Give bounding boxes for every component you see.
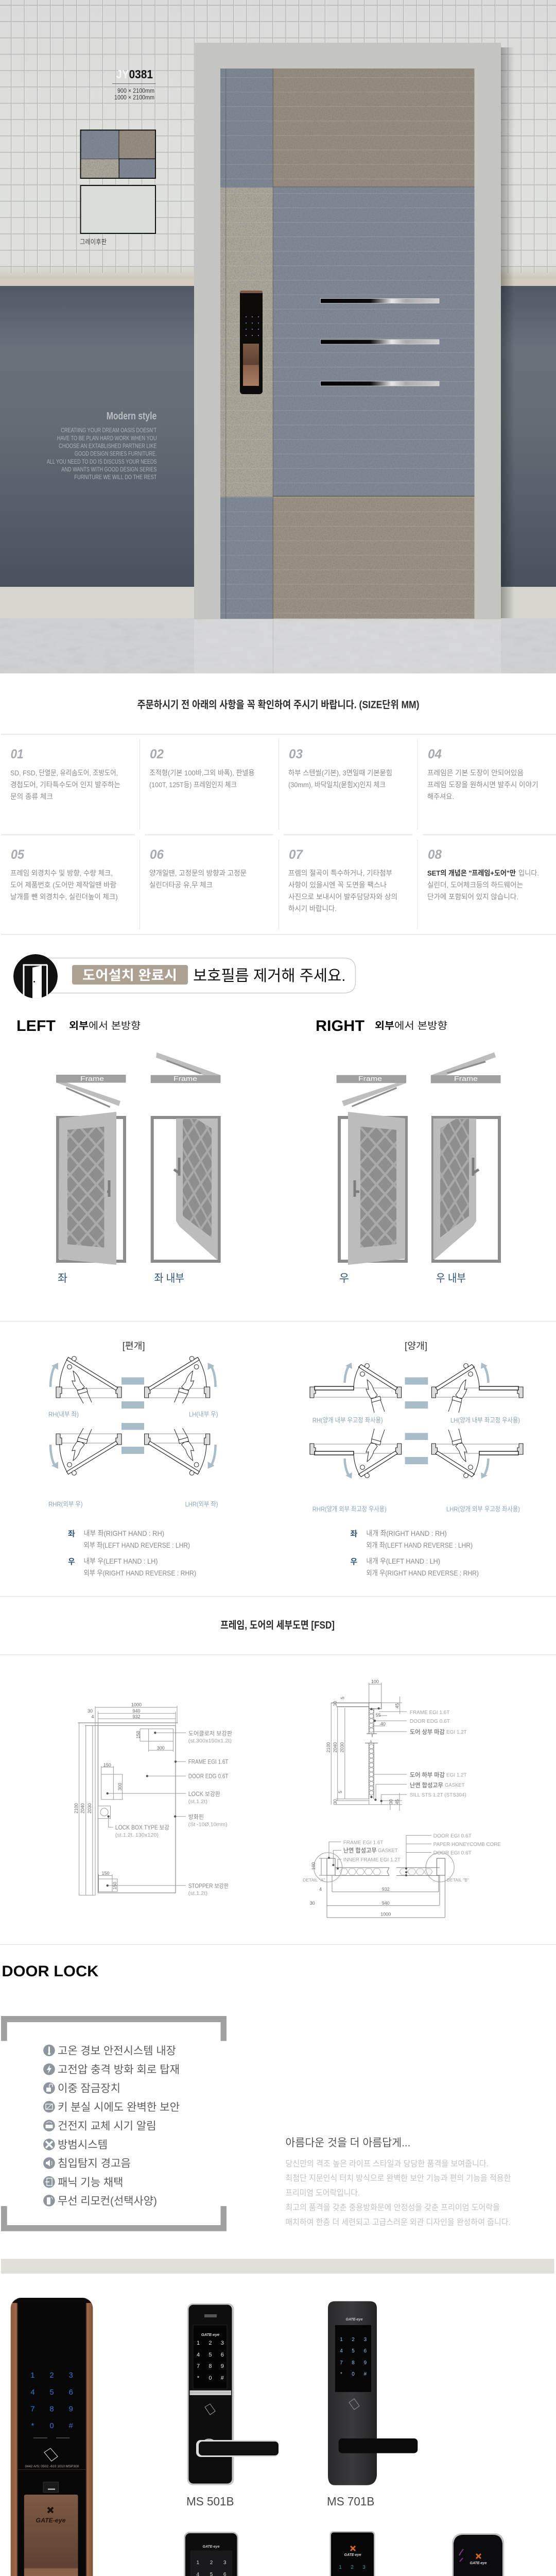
protective film banner xyxy=(13,954,355,999)
drawing callouts: door: (st.300x150x1.2t) xyxy=(188,1738,232,1744)
drawing callouts: door: LOCK BOX TYPE 보강 xyxy=(115,1824,169,1831)
legend: single door: 외부 좌(LEFT HAND REVERSE : LHR) xyxy=(83,1541,190,1549)
product: MS 701B: 5 xyxy=(352,2348,355,2354)
product: MSP 300: 2 xyxy=(49,2371,54,2380)
model number: JY xyxy=(116,67,129,81)
section callouts: DOOR EDG 0.6T xyxy=(410,1718,450,1724)
product: MS 701B: 6 xyxy=(364,2348,367,2354)
legend: single door: 우 xyxy=(68,1557,75,1566)
note 05: 도어 제품번호 (도어만 제작일땐 바람 xyxy=(10,881,116,889)
product: MS 701B: * xyxy=(340,2371,342,2377)
drawing dimensions: 2030 xyxy=(87,1803,92,1814)
swing diagram: double door RH: RH(양개 내부 우고정 좌사용) xyxy=(312,1416,383,1424)
RIGHT heading: 외부 xyxy=(375,1020,394,1031)
model number: 0381 xyxy=(129,67,153,81)
note 01 xyxy=(10,747,120,801)
product: MSP 300: 8 xyxy=(49,2405,54,2413)
product: MS 830B: 2 xyxy=(210,2560,213,2566)
horizontal section labels: DOOR EGI 0.6T xyxy=(433,1833,472,1839)
drawing dimensions: 4 xyxy=(91,1714,94,1719)
swing diagram: single door LHR xyxy=(145,1428,218,1508)
drawing callouts: door: STOPPER 보강판 xyxy=(188,1883,229,1890)
section dimensions: 5 xyxy=(340,1697,345,1699)
section dimensions: 2040 xyxy=(333,1742,338,1753)
hero scene: door against tiled wall xyxy=(0,0,556,673)
product: MSP 300: 1 xyxy=(30,2371,35,2380)
door front: right interior xyxy=(433,1117,499,1261)
model number xyxy=(116,67,153,81)
drawing callouts: door: FRAME EGI 1.6T xyxy=(188,1759,229,1765)
product: MS 701B: 1 xyxy=(340,2337,343,2343)
technical drawing: vertical section xyxy=(331,1683,407,1811)
horizontal section labels: PAPER HONEYCOMB CORE xyxy=(433,1841,501,1848)
note 07: 사항이 있을시엔 꼭 도면을 팩스나 xyxy=(288,881,387,889)
drawing dimensions: 150 xyxy=(101,1871,110,1876)
single door heading: [편개] xyxy=(123,1341,145,1351)
section callouts: FRAME EGI 1.6T xyxy=(410,1709,450,1716)
note 03 xyxy=(288,747,392,789)
drawing callouts: door: DOOR EDG 0.6T xyxy=(188,1773,229,1780)
feature: panic function: 패닉 기능 채택 xyxy=(58,2177,123,2189)
modern style copy: AND WANTS WITH GOOD DESIGN SERIES xyxy=(61,467,157,473)
legend: double door: 좌 xyxy=(350,1530,357,1538)
product: MS 501B: 2 xyxy=(208,2340,212,2346)
feature: security system: 방범시스템 xyxy=(58,2139,108,2151)
feature: battery alert: 건전지 교체 시기 알림 xyxy=(58,2120,157,2132)
product: MS 830B: 1 xyxy=(197,2560,200,2566)
feature list xyxy=(43,2044,180,2207)
modern style copy: GOOD DESIGN SERIES FURNITURE. xyxy=(75,451,157,457)
product: MS 501B: 4 xyxy=(197,2352,200,2358)
product: MS 701B: 2 xyxy=(352,2337,355,2343)
section callouts xyxy=(410,1709,467,1798)
note 08: 08 xyxy=(428,848,442,862)
section dimensions: 30 xyxy=(333,1701,338,1706)
drawing callouts: door: 도어클로저 보강판 xyxy=(188,1730,232,1737)
legend: double door xyxy=(350,1529,479,1577)
door front: right exterior xyxy=(339,1112,406,1265)
center markers: double door xyxy=(405,1377,428,1464)
product: MS 701B: 8 xyxy=(352,2360,355,2366)
model rule xyxy=(112,83,155,84)
door shadow xyxy=(501,47,514,618)
product label: MS 701B: MS 701B xyxy=(327,2495,374,2508)
note 04: 프레임은 기본 도장이 안되어있음 xyxy=(427,769,524,777)
swing diagram: double door RHR xyxy=(310,1429,402,1513)
product: MS 830B: GATE-eye xyxy=(203,2545,220,2549)
section dimensions xyxy=(326,1679,399,1804)
section dimensions: 2100 xyxy=(326,1742,331,1753)
section dimensions: 40 xyxy=(380,1721,386,1726)
note 08: 입니다. xyxy=(518,869,539,877)
note 03: (30mm), 바닥일치(묻힘X)인지 체크 xyxy=(288,781,386,789)
section dimensions: 5 xyxy=(338,1791,343,1793)
product: MSP 300: 4 xyxy=(30,2388,35,2397)
swing diagram: double door LHR xyxy=(431,1429,523,1513)
product: MS 701B: GATE-eye xyxy=(346,2318,363,2321)
swing diagram: single door RHR: RHR(외부 우) xyxy=(48,1500,82,1508)
note 06: 06 xyxy=(150,848,164,862)
note 05: 날개를 뺀 외경치수, 실린더높이 체크) xyxy=(10,893,118,901)
door front: left interior xyxy=(152,1117,219,1261)
product: MSP 300: GATE-eye xyxy=(36,2518,66,2524)
section dimensions: 2030 xyxy=(340,1742,345,1753)
section callouts: SILL STS 1.2T (STS304) xyxy=(410,1792,466,1798)
double door heading: [양개] xyxy=(405,1341,427,1351)
drawing dimensions: 2100 xyxy=(74,1803,79,1814)
product: MS 501B: # xyxy=(221,2375,224,2381)
product: MS 501B: * xyxy=(197,2375,200,2381)
swing diagram: single door RH xyxy=(48,1357,121,1418)
door labels: 좌 xyxy=(58,1273,67,1284)
RIGHT heading: RIGHT xyxy=(316,1018,364,1035)
swing diagram: single door RHR xyxy=(48,1428,121,1508)
product: MSP 300: 0442 A/S: 0502 -610 1010 MSP300 xyxy=(25,2465,79,2468)
horizontal section labels: 난연 합성고무 xyxy=(343,1846,377,1854)
product: MS 601B: GATE-eye xyxy=(470,2562,487,2565)
modern style copy: HAVE TO BE PLAN HARD WORK WHEN YOU xyxy=(57,435,157,442)
gray backing swatch xyxy=(80,185,155,233)
product: MS 501B: GATE-eye xyxy=(201,2332,219,2337)
note 02: (100T, 125T등) 프레임인지 체크 xyxy=(149,781,237,789)
door labels: 우 xyxy=(339,1273,349,1284)
plan view: right interior: Frame xyxy=(454,1075,478,1082)
icon: door in black circle xyxy=(13,954,58,999)
note 02: 조적형(기본 100바,그외 바폭), 판넬용 xyxy=(149,769,255,777)
plan view: right exterior: Frame xyxy=(358,1075,382,1082)
swing diagram: single door RH: RH(내부 좌) xyxy=(48,1411,79,1418)
order notice heading: 주문하시기 전 아래의 사항을 꼭 확인하여 주시기 바랍니다. (SIZE단위 MM) xyxy=(137,699,419,711)
product: MS 701B: 0 xyxy=(352,2371,355,2377)
door handle slots xyxy=(320,299,439,386)
chair rail xyxy=(0,279,556,286)
product: MS 501B: 8 xyxy=(208,2363,212,2369)
product: MS 902 xyxy=(329,2531,418,2576)
product: MS 701B: 3 xyxy=(364,2337,367,2343)
swing diagram: single door LHR: LHR(외부 좌) xyxy=(185,1500,218,1508)
baseboard xyxy=(0,587,556,618)
horizontal section labels: 940 xyxy=(382,1901,390,1906)
drawing dimensions: 300 xyxy=(157,1745,165,1751)
LEFT heading xyxy=(16,1018,141,1035)
section dimensions: 45 xyxy=(394,1799,399,1804)
legend: double door: 내개 좌(RIGHT HAND : RH) xyxy=(366,1529,447,1537)
RIGHT heading: 에서 본방향 xyxy=(394,1020,447,1031)
door lock copy heading: 아름다운 것을 더 아름답게... xyxy=(285,2137,410,2149)
RIGHT heading xyxy=(316,1018,447,1035)
feature: wireless remote: 무선 리모컨(선택사양) xyxy=(58,2195,157,2207)
door lock copy xyxy=(285,2159,511,2227)
legend: single door: 내부 우(LEFT HAND : LH) xyxy=(83,1557,158,1565)
drawing callouts: door xyxy=(115,1730,232,1896)
product: MS 902: 2 xyxy=(351,2565,354,2570)
drawing dimensions: 150 xyxy=(112,1882,117,1890)
center markers: single door xyxy=(121,1377,144,1454)
drawing dimensions: 940 xyxy=(132,1708,141,1714)
product: MSP 300: 7 xyxy=(30,2405,35,2413)
horizontal section labels: 932 xyxy=(382,1887,390,1892)
feature: lost key security: 키 분실 시에도 완벽한 보안 xyxy=(58,2102,180,2113)
door labels: 우 내부 xyxy=(436,1273,466,1284)
horizontal section labels: 30 xyxy=(310,1901,315,1906)
note 04 xyxy=(427,747,538,801)
plan view: left exterior xyxy=(56,1075,126,1108)
plan view: left interior xyxy=(151,1053,220,1083)
tag xyxy=(72,965,188,985)
note 02: 02 xyxy=(150,747,164,761)
product: MS 902: 1 xyxy=(339,2565,342,2570)
door lock copy: 프리미엄 도어락입니다. xyxy=(285,2189,360,2198)
product: MS 701B: 7 xyxy=(340,2360,343,2366)
note 07: 07 xyxy=(289,848,303,862)
section callouts: GASKET xyxy=(445,1782,465,1788)
drawing markers xyxy=(106,1732,177,1887)
drawing callouts: door: (st.1.2t) xyxy=(188,1799,207,1805)
note 07 xyxy=(288,848,397,913)
modern style copy: ALL YOU NEED TO DO IS DISCUSS YOUR NEEDS xyxy=(47,459,157,465)
product: MS 501B: 1 xyxy=(197,2340,200,2346)
section callouts: EGI 1.2T xyxy=(446,1772,467,1778)
drawing callouts: door: (st.1.2t) xyxy=(188,1890,207,1896)
size text: 1000 × 2100mm xyxy=(114,94,154,101)
note 01: SD, FSD, 단열문, 유리솜도어, 조방도어, xyxy=(10,769,118,777)
note 08 xyxy=(427,848,539,901)
product: MS 501B: 9 xyxy=(221,2363,224,2369)
product label: MS 501B: MS 501B xyxy=(186,2495,234,2508)
note 04: 해주셔요. xyxy=(427,792,454,801)
product: MS 501B: 3 xyxy=(221,2340,224,2346)
plan view: right exterior xyxy=(337,1075,406,1107)
notes grid xyxy=(10,747,539,913)
legend: single door: 좌 xyxy=(68,1530,75,1538)
floor xyxy=(0,618,556,673)
DOOR LOCK heading: DOOR LOCK xyxy=(2,1963,99,1980)
product: MS 701B: 4 xyxy=(340,2348,343,2354)
section callouts: 난연 합성고무 xyxy=(410,1782,443,1789)
product: MS 830B: 3 xyxy=(223,2560,227,2566)
swing diagram: double door LHR: LHR(양개 외부 우고정 좌사용) xyxy=(446,1505,520,1513)
feature: high temperature alarm: 고온 경보 안전시스템 내장 xyxy=(58,2045,176,2057)
product: MSP 300: 3 xyxy=(69,2371,73,2380)
note 04: 04 xyxy=(428,747,442,761)
plan view: right interior xyxy=(431,1052,500,1083)
product: MS 902: GATE-eye xyxy=(344,2553,361,2557)
size text: 900 × 2100mm xyxy=(117,87,154,94)
swing diagram: double door RH xyxy=(310,1363,402,1424)
swing diagram: single door LH: LH(내부 우) xyxy=(189,1411,218,1418)
feature: intrusion alert: 침입탐지 경고음 xyxy=(58,2158,131,2170)
horizontal section labels xyxy=(303,1833,501,1917)
door labels xyxy=(58,1273,466,1284)
product: MS 701B xyxy=(328,2301,418,2485)
horizontal section labels: DETAIL "B" xyxy=(447,1877,469,1883)
legend: double door: 내개 우(LEFT HAND : LH) xyxy=(366,1557,440,1565)
LEFT heading: 외부 xyxy=(69,1020,89,1031)
drawing dimensions: 1000 xyxy=(131,1702,142,1707)
digital door lock on door xyxy=(240,291,263,394)
door front: left exterior xyxy=(58,1112,125,1265)
door lock copy: 당신만의 격조 높은 라이프 스타일과 당당한 품격을 보여줍니다. xyxy=(285,2159,489,2168)
note 07: 프렘의 절곡이 특수하거나, 기타첨부 xyxy=(288,869,392,877)
horizontal section labels: FRAME EGI 1.6T xyxy=(343,1839,384,1845)
drawing dimensions: 2040 xyxy=(80,1803,85,1814)
note 07: 하시기 바랍니다. xyxy=(288,905,337,913)
note 01: 01 xyxy=(11,747,24,761)
banner message: 보호필름 제거해 주세요. xyxy=(193,968,346,985)
wall tiles xyxy=(0,0,556,279)
product: MS 501B: 6 xyxy=(221,2352,224,2358)
door colour swatch xyxy=(80,130,155,178)
door frame xyxy=(194,43,501,619)
product: MSP 300: 9 xyxy=(69,2405,73,2413)
gray band xyxy=(1,2259,554,2274)
note 04: 프레임 도장을 원하시면 발주시 이야기 xyxy=(427,781,538,789)
drawing dimensions xyxy=(74,1702,165,1890)
product: MS 601B xyxy=(452,2533,553,2576)
note 08: SET의 개념은 "프레임+도어"만 xyxy=(427,869,516,877)
swing diagram: double door RHR: RHR(양개 외부 좌고정 우사용) xyxy=(312,1505,387,1513)
note 06: 실린더타공 유,무 체크 xyxy=(149,881,213,889)
size text xyxy=(114,87,154,101)
section dimensions: 55 xyxy=(376,1713,381,1718)
door leaf with colour blocks xyxy=(220,69,475,619)
feature list bracket xyxy=(1,2016,227,2231)
drawing callouts: door: (st.1.2t. 130x120) xyxy=(115,1832,159,1838)
section callouts: 도어 하부 마감 xyxy=(410,1772,445,1778)
product: MS 701B: # xyxy=(364,2371,367,2377)
drawing dimensions: 932 xyxy=(132,1714,141,1719)
technical drawing: horizontal section xyxy=(314,1835,454,1918)
horizontal section labels: INNER FRAME EGI 1.2T xyxy=(343,1857,401,1863)
product: MS 830B xyxy=(184,2532,285,2576)
drawing callouts: door: (St -10Ø,10mm) xyxy=(188,1822,228,1828)
note 06 xyxy=(149,848,247,889)
swatch caption: 그레이후판 xyxy=(80,238,107,246)
drawing dimensions: 150 xyxy=(136,1731,141,1739)
section dimensions: 45 xyxy=(394,1703,399,1708)
product: MSP 300: * xyxy=(31,2421,34,2430)
door labels: 좌 내부 xyxy=(154,1273,184,1284)
note 01: 경첩도어, 기타특수도어 인지 발주하는 xyxy=(10,781,120,789)
dark lower wall xyxy=(0,286,556,587)
product: MS 501B: 0 xyxy=(208,2375,212,2381)
section markers xyxy=(370,1707,383,1802)
drawing callouts: door: 방화핀 xyxy=(188,1814,204,1821)
modern style copy: CREATIING YOUR DREAM OASIS DOESN'T xyxy=(61,428,157,434)
note 05: 05 xyxy=(11,848,25,862)
legend: double door: 외개 좌(LEFT HAND REVERSE : LHR) xyxy=(366,1541,473,1549)
horizontal section labels: DETAIL "A" xyxy=(303,1877,325,1883)
product: MSP 300 xyxy=(11,2298,93,2576)
product: MSP 300: 0 xyxy=(49,2421,54,2430)
LEFT heading: LEFT xyxy=(16,1018,56,1035)
drawing callouts: door: LOCK 보강판 xyxy=(188,1791,220,1798)
feature: double lock: 이중 잠금장치 xyxy=(58,2082,120,2095)
swing diagram: double door LH xyxy=(431,1363,523,1424)
product: MS 501B xyxy=(187,2303,279,2485)
modern style copy: FURNITURE WE WILL DO THE REST xyxy=(74,474,157,481)
LEFT heading: 에서 본방향 xyxy=(89,1020,141,1031)
section callouts: 도어 상부 마감 xyxy=(410,1729,445,1735)
drawing dimensions: 30 xyxy=(88,1708,93,1714)
section dimensions: 30 xyxy=(333,1799,338,1804)
note 06: 양개일땐, 고정문의 방향과 고정문 xyxy=(149,869,247,877)
swing diagram: double door LH: LH(양개 내부 좌고정 우사용) xyxy=(450,1416,520,1424)
plan view: left exterior: Frame xyxy=(80,1075,104,1082)
drawing section heading: 프레임, 도어의 세부도면 [FSD] xyxy=(220,1619,335,1631)
product: MSP 300: 6 xyxy=(69,2388,73,2397)
legend: double door: 우 xyxy=(350,1557,357,1566)
swing diagram: single door LH xyxy=(145,1357,218,1418)
legend: single door: 외부 우(RIGHT HAND REVERSE : RHR) xyxy=(83,1569,196,1577)
plan view: left interior: Frame xyxy=(173,1075,197,1082)
modern style copy xyxy=(47,428,157,481)
product: MSP 300: 5 xyxy=(49,2388,54,2397)
horizontal section labels: 4 xyxy=(319,1887,322,1892)
door lock copy: 최첨단 지문인식 터치 방식으로 완벽한 보안 기능과 편의 기능을 적용한 xyxy=(285,2174,511,2183)
modern style heading: Modern style xyxy=(107,411,157,422)
section dimensions: 30 xyxy=(389,1799,394,1804)
horizontal section labels: 1000 xyxy=(380,1911,391,1917)
horizontal section labels: 100 xyxy=(311,1862,316,1870)
technical drawing: door elevation xyxy=(78,1706,186,1895)
horizontal section labels: DOOR EGI 0.6T xyxy=(433,1850,472,1856)
note 03: 03 xyxy=(289,747,303,761)
note 02 xyxy=(149,747,255,789)
tag: 도어설치 완료시 xyxy=(82,968,177,983)
feature: discharge circuit: 고전압 충격 방화 회로 탑재 xyxy=(58,2064,180,2076)
drawing dimensions: 300 xyxy=(117,1783,123,1791)
rounded banner outline xyxy=(48,958,355,993)
legend: single door xyxy=(68,1529,196,1577)
note 03: 하부 스텐씰(기본), 3면일때 기본묻힘 xyxy=(288,769,392,777)
section dimensions: 100 xyxy=(371,1679,379,1684)
product: MSP 300: # xyxy=(69,2421,74,2430)
horizontal section labels: GASKET xyxy=(378,1848,398,1854)
product: MS 501B: 5 xyxy=(208,2352,212,2358)
note 05 xyxy=(10,848,118,901)
legend: single door: 내부 좌(RIGHT HAND : RH) xyxy=(83,1529,164,1537)
note 08: 실린더, 도어체크등의 하드웨어는 xyxy=(427,881,523,889)
modern style copy: CHOOSE AN EXTABLISHED PARTNER LIKE xyxy=(59,444,157,450)
product: MS 501B: 7 xyxy=(197,2363,200,2369)
drawing dimensions: 150 xyxy=(103,1762,111,1768)
note 08: 단가에 포함되어 있지 않습니다. xyxy=(427,893,518,901)
product: MS 701B: 9 xyxy=(364,2360,367,2366)
section callouts: EGI 1.2T xyxy=(446,1729,467,1735)
door lock copy: 매치하여 한층 더 세련되고 고급스러운 외관 디자인을 완성하여 줍니다. xyxy=(285,2217,511,2227)
legend: double door: 외개 우(RIGHT HAND REVERSE : RHR) xyxy=(366,1569,479,1577)
note 05: 프레임 외경치수 및 방향, 수량 체크, xyxy=(10,869,113,877)
note 07: 사진으로 보내시어 발주담당자와 상의 xyxy=(288,893,397,901)
horizontal section markers xyxy=(328,1857,407,1876)
door lock copy: 최고의 품격을 갖춘 중용방화문에 안정성을 갖춘 프리이엄 도어락을 xyxy=(285,2203,500,2212)
product: MS 902: 3 xyxy=(362,2565,366,2570)
note 01: 문의 종류 체크 xyxy=(10,792,53,801)
